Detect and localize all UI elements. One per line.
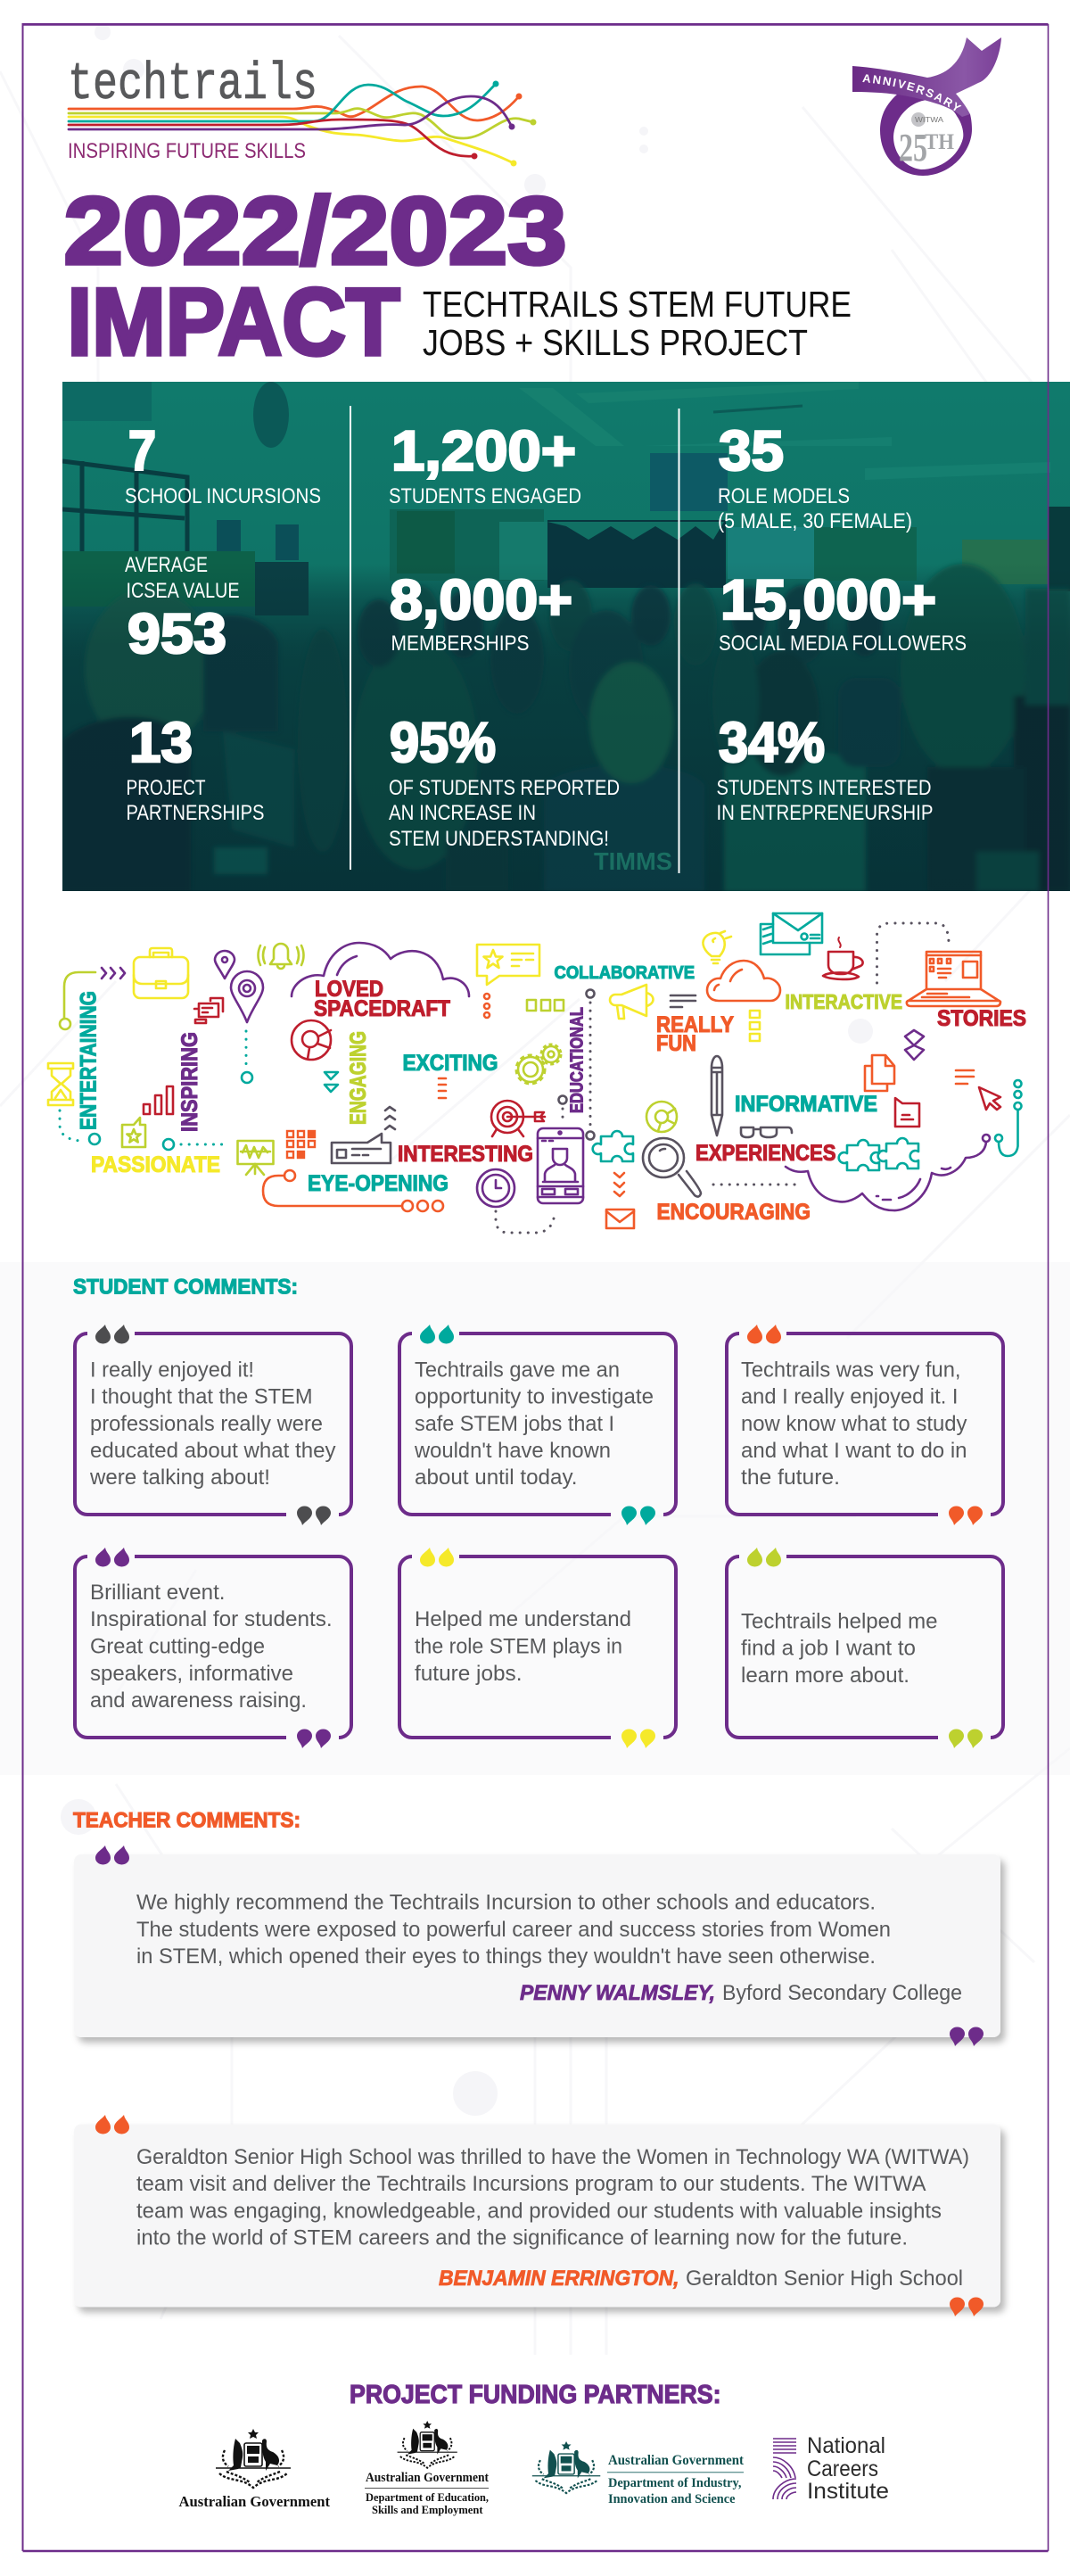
icon: orange documents (865, 1055, 894, 1091)
stat: role models: (5 MALE, 30 FEMALE) (718, 509, 912, 533)
NCI stripe mark (773, 2439, 796, 2499)
stat: STEM understanding: 95% (390, 712, 496, 774)
card: student comment 5: Helped me understand (415, 1607, 631, 1631)
stat: entrepreneurship: 34% (719, 712, 825, 774)
icon: purple bottom cloud (786, 1135, 990, 1210)
stat: role models: ROLE MODELS (718, 484, 850, 508)
word: loved spacedraft: LOVED (315, 977, 383, 1002)
photo upper room details (62, 382, 1070, 615)
icon: yellow squares (750, 1011, 760, 1041)
icon: phone with person (538, 1128, 583, 1203)
icon: puzzle right (878, 1138, 918, 1168)
logo wordmark: techtrails (68, 56, 317, 114)
card: student comment 1: were talking about! (89, 1466, 270, 1490)
icon: puzzle middle (839, 1140, 879, 1170)
card: teacher comment 1: in STEM, which opened their eyes to things they wouldn't have seen otherwise. (136, 1944, 876, 1969)
logo: Department of Industry: Department of Industry, (608, 2476, 742, 2490)
stat: project partnerships: PROJECT (127, 776, 206, 800)
icon: grey chat box (332, 1134, 391, 1163)
title (64, 177, 852, 375)
icon: lime squares (527, 1000, 564, 1011)
icon: glasses (741, 1127, 792, 1137)
logo: Department of Education: Department of Education, (366, 2490, 489, 2504)
anniversary ribbon badge: TH (925, 130, 955, 154)
stat: students engaged: STUDENTS ENGAGED (389, 484, 581, 508)
icon: orange grid (287, 1131, 315, 1158)
word: exciting: EXCITING (403, 1051, 498, 1076)
card: teacher comment 1: The students were exposed to powerful career and success stories from Women (136, 1918, 891, 1942)
stat: school incursions: SCHOOL INCURSIONS (125, 484, 321, 508)
stat: school incursions: 7 (128, 420, 156, 483)
logo: Department of Industry: Innovation and Science (608, 2492, 736, 2506)
icon: bell (259, 944, 303, 969)
card: student comment 6 (727, 1548, 1003, 1748)
icon: red donut (292, 1020, 331, 1060)
word: loved spacedraft: SPACEDRAFT (314, 996, 450, 1021)
logo: National Careers Institute (773, 2433, 889, 2504)
card: student comment 5: future jobs. (415, 1662, 523, 1686)
icon: presentation board (237, 1141, 273, 1175)
stat: ICSEA value: 953 (128, 603, 226, 665)
card: teacher comment 2: BENJAMIN ERRINGTON, (439, 2266, 679, 2291)
word cloud with icons (48, 913, 1026, 1233)
word: loved spacedraft (314, 977, 450, 1021)
word: entertaining: ENTERTAINING (77, 991, 102, 1130)
icon: orange envelope (606, 1210, 634, 1228)
anniversary ribbon badge (852, 37, 1001, 176)
card: student comment 1: I really enjoyed it! (90, 1358, 254, 1383)
connector: grey dotted vertical (558, 990, 594, 1140)
icon: magnifier (643, 1138, 701, 1197)
card: student comment 3: Techtrails was very fun, (741, 1358, 961, 1383)
logo: Australian Government: Australian Government (178, 2493, 330, 2510)
title year: 2022/2023 (64, 177, 567, 284)
stat: social media followers: SOCIAL MEDIA FOLLOWERS (719, 632, 967, 656)
logo: Department of Education: Skills and Employment (372, 2503, 483, 2516)
icon: briefcase (134, 948, 188, 998)
stat: entrepreneurship: STUDENTS INTERESTED (717, 776, 931, 800)
icon: pencil (712, 1056, 722, 1135)
title: JOBS + SKILLS PROJECT (423, 322, 808, 363)
card: teacher comment 2 (74, 2115, 1000, 2316)
card: teacher comment 2: Geraldton Senior High School (686, 2266, 963, 2291)
logo: Department of Education (365, 2421, 489, 2516)
badge small emblem: WITWA (915, 116, 944, 124)
connector: orange line (263, 1170, 443, 1211)
icon: orange circles (484, 994, 490, 1018)
connector: teal dotted line (163, 1139, 225, 1150)
card: teacher comment 2: team visit and deliver the Techtrails Incursions program to our students. The WITWA (136, 2172, 926, 2196)
card: teacher comment 2: into the world of STEM careers and the significance of learning now for the future. (136, 2226, 908, 2250)
stat: students engaged: 1,200+ (391, 420, 576, 483)
card: student comment 4: Brilliant event. (90, 1581, 225, 1605)
icon: orange lines (956, 1070, 974, 1084)
word: eye-opening: EYE-OPENING (308, 1171, 449, 1196)
stat: memberships (390, 569, 572, 656)
card: student comment 3 (727, 1325, 1003, 1525)
icon: orange chevrons (614, 1173, 624, 1196)
word: stories: STORIES (937, 1006, 1026, 1031)
card: student comment 1: educated about what they (90, 1439, 336, 1463)
stat: role models (718, 420, 912, 533)
logo: Department of Industry: Australian Government (608, 2453, 745, 2468)
NCI wordmark: National (807, 2433, 885, 2458)
card: student comment 6: find a job I want to (741, 1636, 916, 1661)
word: interesting: INTERESTING (398, 1142, 533, 1167)
card: student comment 4: Inspirational for students. (90, 1607, 333, 1631)
word: informative: INFORMATIVE (735, 1092, 877, 1117)
photo crowd (62, 564, 1070, 892)
logo: Australian Government (178, 2429, 330, 2510)
icon: clock (477, 1169, 514, 1207)
icon: big map pin (231, 971, 263, 1022)
photo shirt lettering: TIMMS (594, 847, 672, 875)
icon: star note (477, 945, 539, 985)
card: student comment 5: the role STEM plays in (415, 1634, 622, 1659)
card: teacher comment 1: PENNY WALMSLEY, (520, 1981, 715, 2005)
card: student comment 4 (75, 1548, 351, 1748)
word: engaging: ENGAGING (346, 1031, 371, 1125)
word: really fun (656, 1012, 734, 1056)
card: teacher comment 2: team was engaging, knowledgeable, and provided our students with valuable insights (136, 2200, 942, 2223)
card: student comment 1: I thought that the STEM (90, 1384, 312, 1409)
badge ring (880, 94, 972, 176)
card: student comment 6: Techtrails helped me (741, 1609, 938, 1634)
stat: school incursions (125, 420, 321, 508)
stat: social media followers: 15,000+ (720, 569, 936, 632)
heading: project funding partners: PROJECT FUNDING PARTNERS: (350, 2381, 720, 2409)
card: student comment 2: about until today. (415, 1466, 578, 1490)
card: student comment 2: wouldn't have known (414, 1439, 611, 1463)
card: student comment 4: speakers, informative (90, 1662, 293, 1686)
icon: purple chevrons (102, 968, 125, 978)
icon: laptop (907, 952, 1000, 1006)
stat: ICSEA value: AVERAGE (125, 553, 208, 577)
stat: STEM understanding (389, 712, 620, 851)
card: student comment 2: Techtrails gave me an (415, 1358, 620, 1383)
panel photo background (62, 382, 1070, 892)
logo coloured trails (69, 84, 533, 163)
word: really fun: REALLY (656, 1012, 734, 1037)
anniversary ribbon badge: ANNIVERSARY (862, 74, 961, 111)
icon: cursor (979, 1087, 1000, 1110)
stat: ICSEA value: ICSEA VALUE (127, 579, 239, 603)
connector: teal hook (995, 1080, 1022, 1156)
card: student comment 1 (75, 1325, 351, 1525)
stat: project partnerships (127, 712, 264, 825)
stat: STEM understanding: STEM UNDERSTANDING! (389, 827, 609, 851)
icon: coffee cup (823, 937, 863, 979)
icon: teal triangles (325, 1072, 338, 1092)
connector: teal dotted with circle (242, 1031, 252, 1083)
word: passionate: PASSIONATE (91, 1152, 220, 1177)
card: student comment 3: the future. (741, 1466, 840, 1490)
icon: red screens (194, 998, 223, 1023)
stat: project partnerships: PARTNERSHIPS (127, 801, 264, 825)
icon: grey lines (671, 995, 696, 1007)
icon: purple cloud (292, 943, 469, 996)
icon: light bulb (703, 931, 731, 963)
card: student comment 2 (399, 1325, 676, 1525)
card: student comment 6: learn more about. (741, 1664, 910, 1688)
NCI wordmark: Careers (807, 2456, 878, 2481)
icon: purple double chevrons (905, 1030, 924, 1060)
card: teacher comment 1: Byford Secondary College (722, 1981, 962, 2005)
icon: orange cloud (707, 961, 780, 1001)
connector: grey dotted bottom (496, 1211, 555, 1233)
word: educational: EDUCATIONAL (567, 1007, 587, 1113)
card: teacher comment 2: Geraldton Senior High School was thrilled to have the Women in Technology WA (WITWA) (136, 2145, 969, 2169)
icon: puzzle left (593, 1131, 633, 1161)
panel column dividers (350, 406, 679, 873)
icon: small map pin (215, 951, 235, 978)
heading: student comments: STUDENT COMMENTS: (73, 1276, 298, 1299)
stat: social media followers (719, 569, 967, 656)
logo tagline: INSPIRING FUTURE SKILLS (68, 139, 306, 163)
card: student comment 4: Great cutting-edge (90, 1634, 265, 1659)
icon: hourglass (48, 1063, 73, 1105)
icon: red document (895, 1098, 919, 1127)
panel: statistics over photo (62, 382, 1070, 892)
stat: entrepreneurship: IN ENTREPRENEURSHIP (717, 801, 933, 825)
connector: lime line with circle (60, 972, 95, 1029)
icon: star bubble (122, 1118, 145, 1147)
card: teacher comment 1 (74, 1845, 1000, 2046)
logo trail end dots (471, 80, 537, 166)
icon: megaphone (610, 985, 653, 1019)
NCI wordmark: Institute (807, 2479, 889, 2504)
stat: memberships: MEMBERSHIPS (391, 632, 530, 656)
stat: project partnerships: 13 (129, 712, 193, 774)
card: student comment 2: opportunity to investigate (415, 1384, 654, 1409)
heading: teacher comments: TEACHER COMMENTS: (73, 1809, 300, 1832)
connector: grey dotted top (877, 923, 949, 983)
NCI wordmark (807, 2433, 889, 2504)
stat: STEM understanding: OF STUDENTS REPORTED (389, 776, 620, 800)
connector: grey dotted horizontal (713, 1183, 798, 1186)
icon: lime donut (646, 1102, 677, 1132)
stat: memberships: 8,000+ (390, 569, 572, 632)
card: teacher comment 1: We highly recommend the Techtrails Incursion to other schools and educators. (136, 1891, 876, 1914)
logo: techtrails (68, 56, 537, 166)
badge 25th: 25 (899, 126, 927, 169)
icon: target (491, 1101, 545, 1136)
card: student comment 1: professionals really were (90, 1412, 323, 1436)
card: student comment 3: now know what to study (741, 1412, 967, 1436)
photo darkening overlay (62, 599, 1070, 891)
stat: STEM understanding: AN INCREASE IN (389, 801, 536, 825)
badge text (862, 82, 970, 123)
word: interactive: INTERACTIVE (785, 990, 902, 1013)
icon: orange dashes (439, 1078, 446, 1098)
word: experiences: EXPERIENCES (696, 1141, 836, 1166)
card: student comment 3: and what I want to do in (741, 1439, 967, 1463)
icon: gears (516, 1044, 561, 1084)
card: student comment 4: and awareness raising. (90, 1688, 307, 1713)
logo: Department of Education: Australian Government (366, 2471, 489, 2485)
stat: entrepreneurship (717, 712, 933, 825)
logo: Department of Industry (532, 2441, 745, 2506)
word: inspiring: INSPIRING (177, 1032, 202, 1132)
icon: grey chevrons (385, 1107, 395, 1129)
stat: students engaged (389, 420, 581, 508)
subtitle: TECHTRAILS STEM FUTURE (423, 284, 852, 325)
card: student comment 3: and I really enjoyed it. I (741, 1384, 958, 1409)
card: student comment 2: safe STEM jobs that I (415, 1412, 614, 1436)
icon: bar chart (144, 1086, 173, 1114)
word: really fun: FUN (656, 1031, 696, 1056)
connector: teal dotted curve (60, 1110, 100, 1144)
stat: role models: 35 (719, 420, 784, 483)
word: encouraging: ENCOURAGING (656, 1200, 811, 1225)
stat: ICSEA value (125, 553, 239, 665)
title impact: IMPACT (68, 268, 399, 375)
word: collaborative: COLLABORATIVE (555, 963, 695, 983)
icon: teal envelope (761, 913, 822, 954)
badge ribbon (852, 37, 1001, 117)
card: student comment 5 (399, 1548, 676, 1748)
badge small emblem (911, 112, 944, 127)
